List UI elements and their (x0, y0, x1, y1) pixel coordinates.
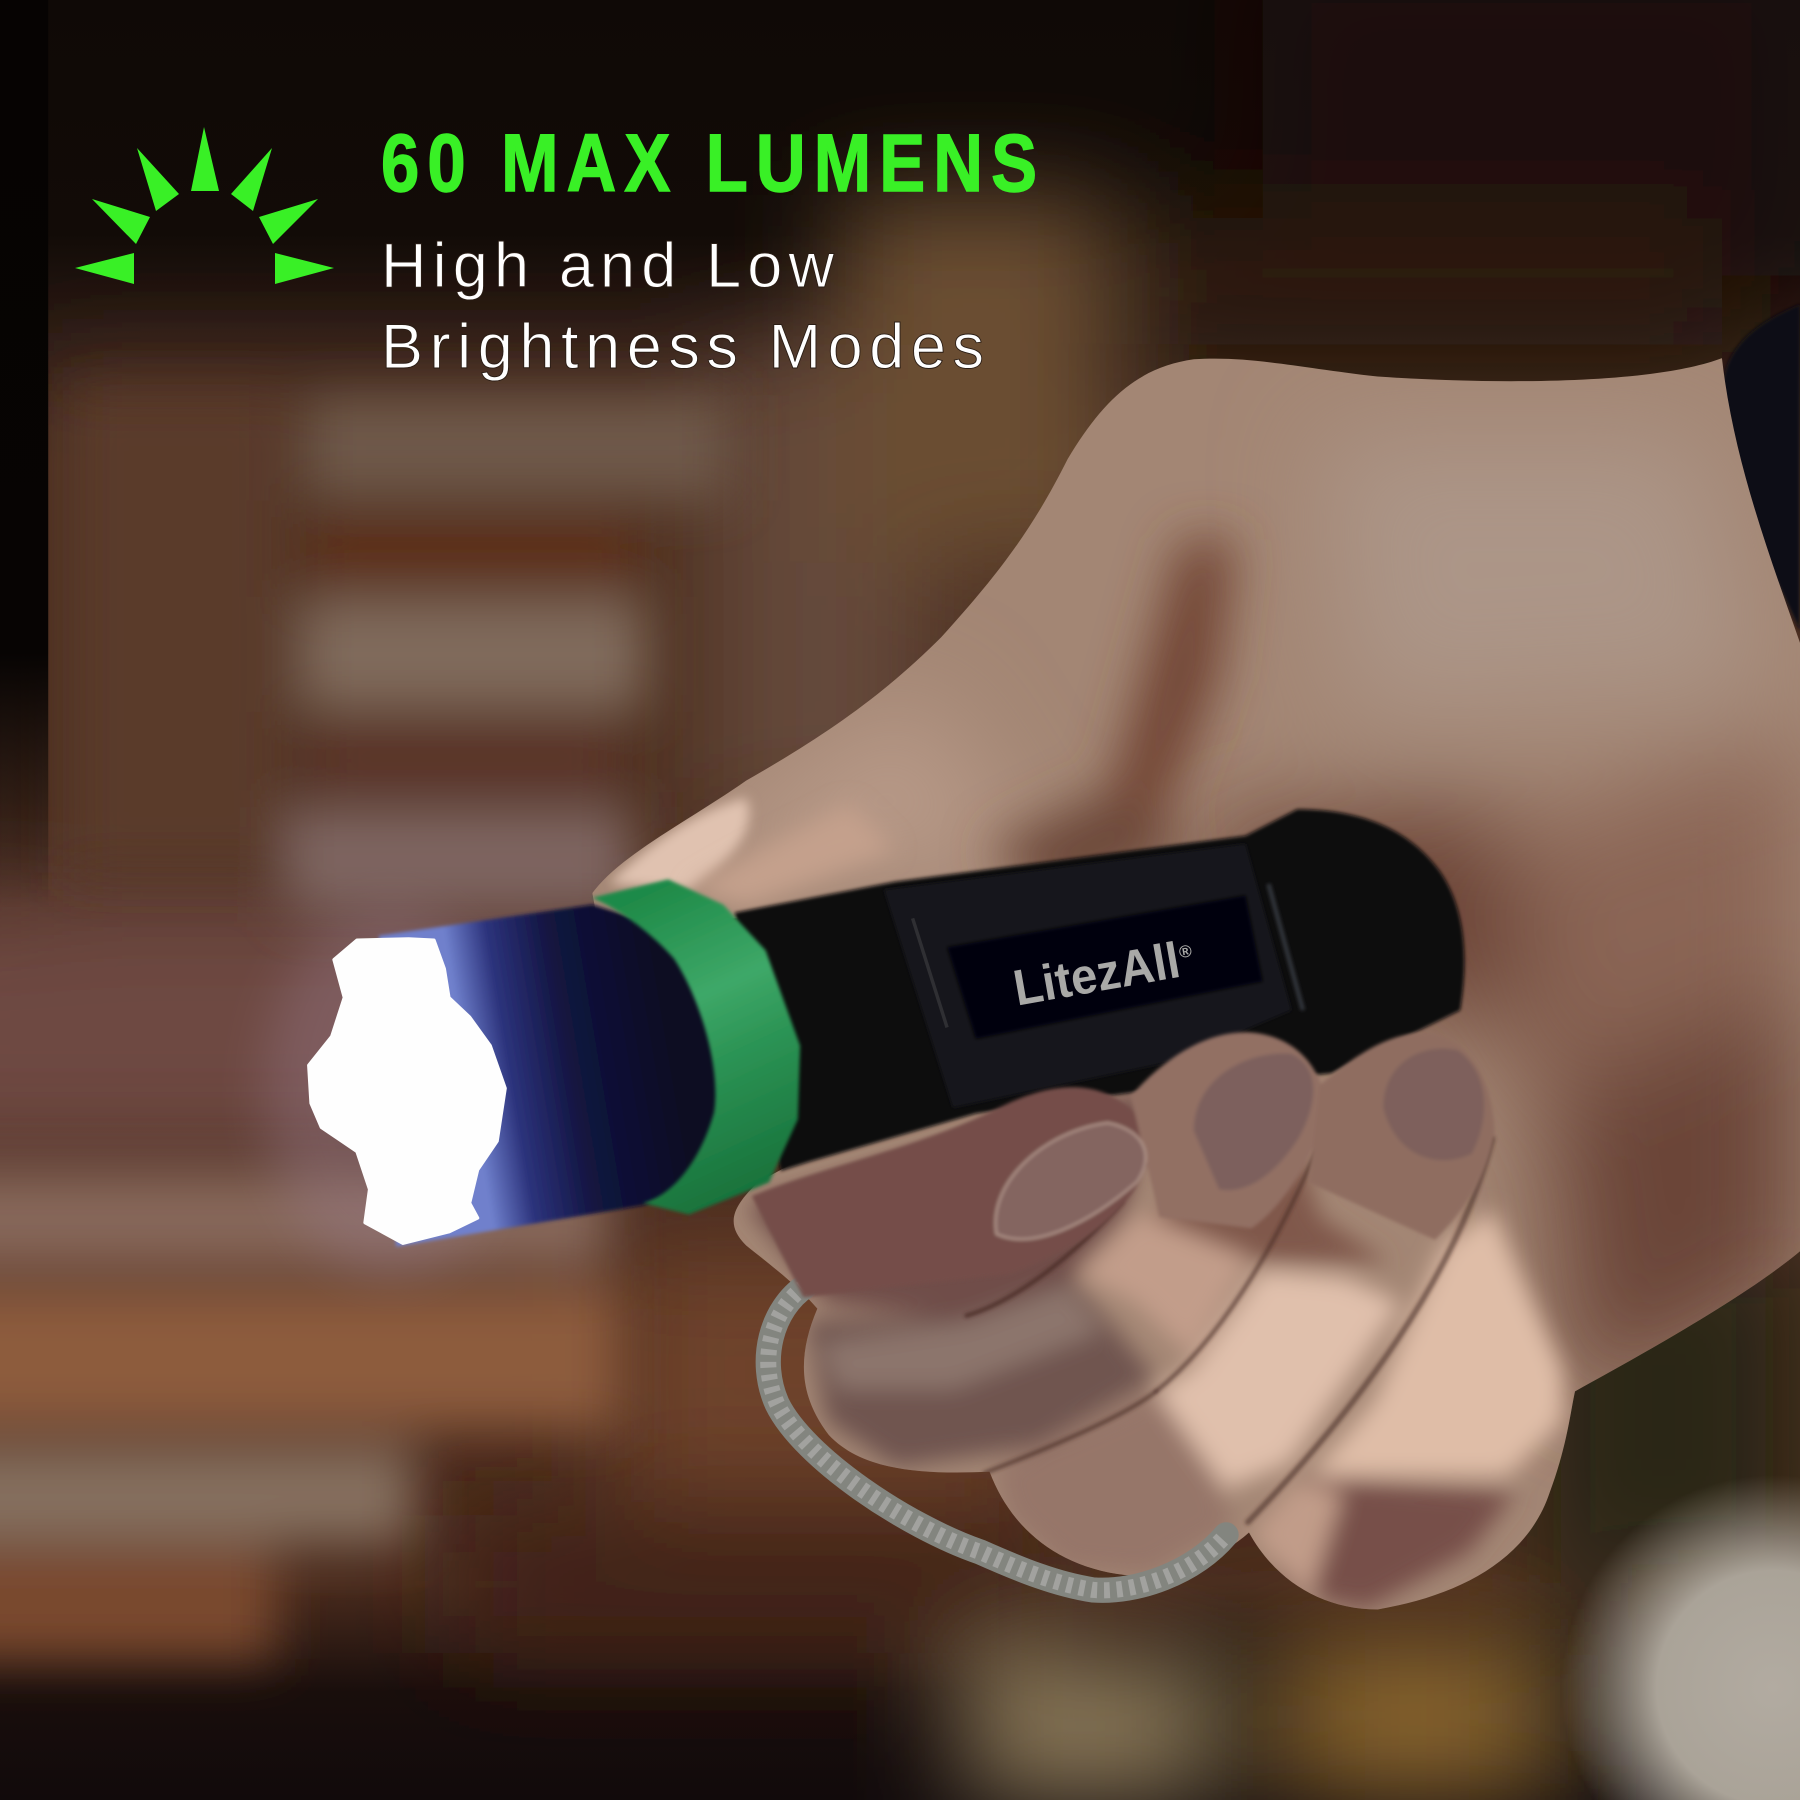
wrist sleeve (1722, 304, 1800, 631)
finger creases (967, 1139, 1492, 1522)
subheading: High and Low (381, 231, 834, 301)
lens (309, 939, 505, 1243)
heading: 60 MAX LUMENS (381, 117, 1037, 209)
finger nails (995, 1123, 1146, 1239)
label patch (947, 895, 1263, 1039)
hand (574, 321, 1800, 1630)
lower fingers (746, 1091, 1564, 1609)
dark left column (0, 0, 48, 907)
icon: light rays (75, 127, 334, 284)
head (379, 905, 746, 1247)
flashlight (264, 809, 1464, 1274)
subheading (381, 231, 984, 382)
halo around lens (264, 907, 517, 1274)
brand logo: ® (1177, 940, 1194, 962)
fingers over flashlight (752, 1032, 1495, 1297)
hand shading (643, 436, 1800, 1412)
flashlight body (735, 809, 1464, 1171)
thumb highlight (608, 798, 749, 890)
green ring (592, 879, 800, 1215)
lanyard strap (768, 1286, 1226, 1590)
brand logo: LitezAll (1009, 931, 1184, 1016)
subheading: Brightness Modes (381, 312, 984, 382)
